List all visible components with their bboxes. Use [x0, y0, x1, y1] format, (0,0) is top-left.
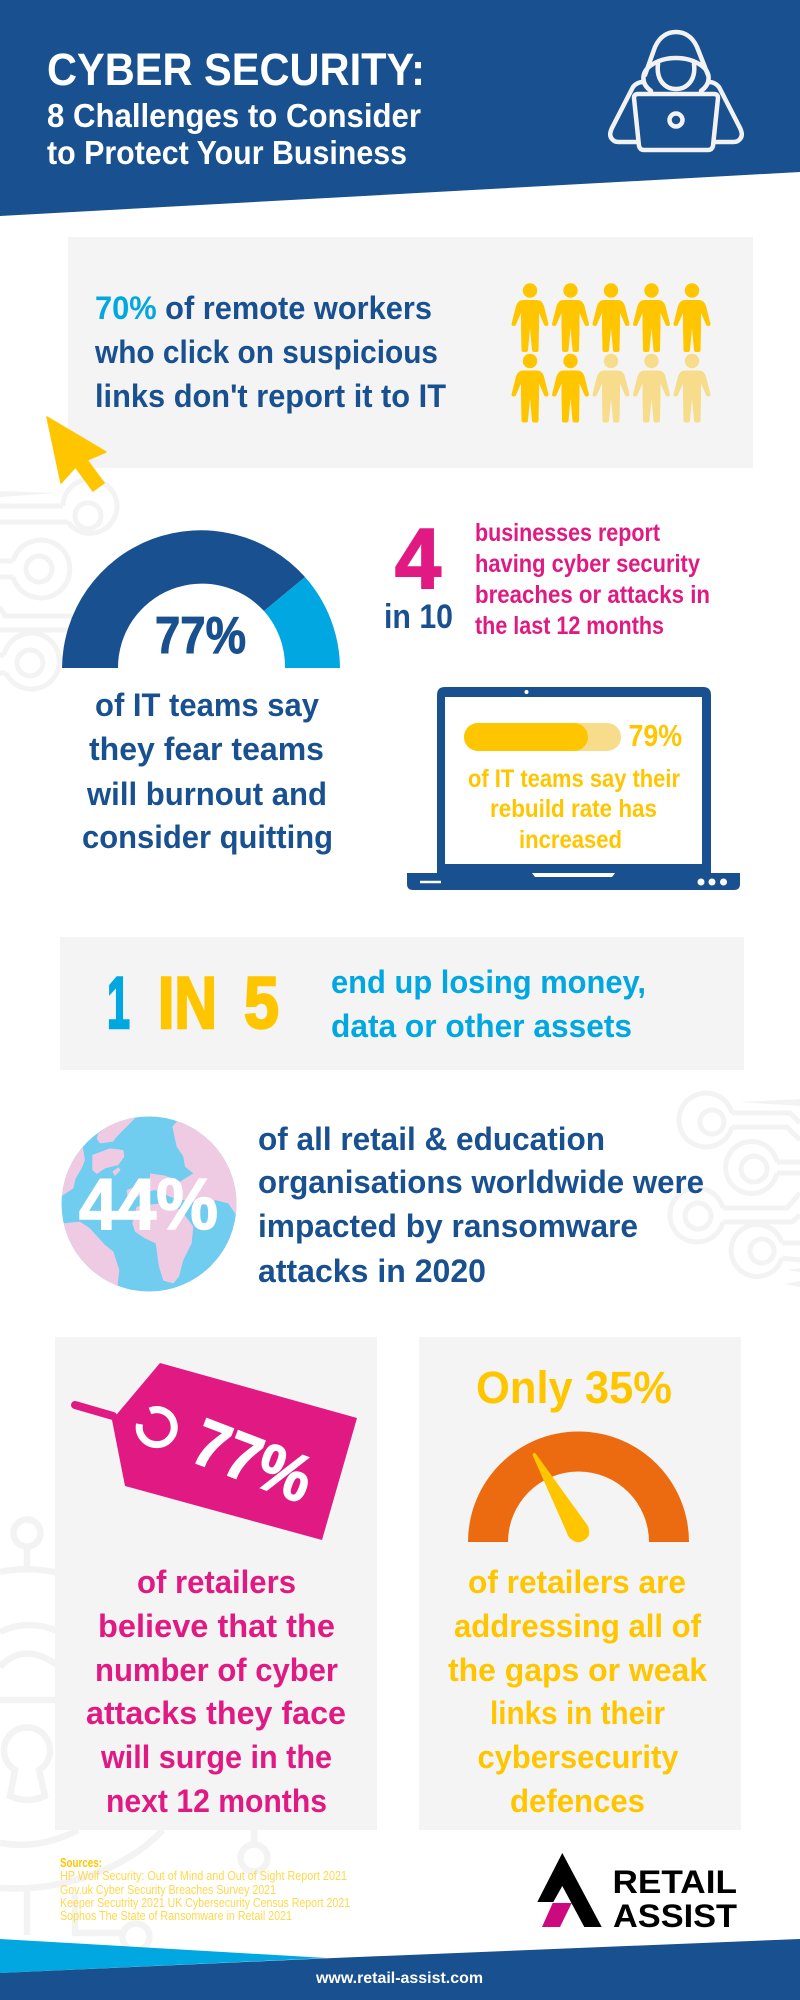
globe: 44%: [60, 1115, 238, 1292]
text: businesses report breaches: [475, 519, 710, 640]
logo: Retail Assist: ASSIST: [613, 1898, 737, 1934]
sources: Gov.uk Cyber Security Breaches Survey 2021: [60, 1883, 276, 1897]
text: businesses report breaches: having cyber security: [475, 550, 700, 578]
progress bar: [464, 723, 621, 751]
title: [47, 44, 425, 171]
text: IT teams burnout: consider quitting: [82, 819, 333, 855]
panel: only 35%: [419, 1337, 741, 1830]
text: ransomware: [258, 1121, 704, 1289]
heading: Only 35%: Only 35%: [476, 1362, 672, 1413]
background circuit pattern: padlock: [0, 1520, 268, 1950]
header banner: [0, 0, 800, 216]
laptop: 79% rebuild rate: [407, 687, 740, 890]
title: 8 Challenges to Consider: [47, 97, 421, 134]
stat: 1 IN 5: [107, 963, 279, 1044]
text: losing money: [331, 964, 646, 1044]
panel: 1 in 5: [60, 937, 744, 1070]
text: IT teams burnout: will burnout and: [86, 776, 327, 812]
text: 70% of remote workers: 70% of remote workers: [95, 290, 432, 326]
sources: HP Wolf Security: Out of Mind and Out of Sight Report 2021: [60, 1869, 347, 1883]
globe: 44%: 44%: [79, 1165, 218, 1245]
text: 70% of remote workers: [94, 290, 446, 414]
sources: Sophos The State of Ransomware in Retail 2021: [60, 1909, 292, 1923]
text: ransomware: impacted by ransomware: [258, 1208, 638, 1244]
text: retailers addressing gaps: of retailers are: [468, 1564, 686, 1600]
footer band: [0, 1939, 800, 2000]
text: retailers addressing gaps: cybersecurity: [478, 1739, 679, 1775]
text: retailers addressing gaps: defences: [510, 1783, 645, 1819]
title: to Protect Your Business: [47, 134, 407, 171]
text: ransomware: attacks in 2020: [258, 1253, 486, 1289]
icon: price tag 77%: 77%: [183, 1404, 323, 1517]
sources: [60, 1856, 350, 1923]
text: 79% rebuild rate: [468, 718, 682, 854]
text: retailers addressing gaps: the gaps or weak: [448, 1652, 707, 1688]
text: retailers surge: next 12 months: [106, 1783, 327, 1819]
sources: Keeper Secutrity 2021 UK Cybersecurity Census Report 2021: [60, 1896, 350, 1910]
gauge: 77% of IT teams: 77%: [155, 607, 246, 665]
text: losing money: data or other assets: [331, 1008, 632, 1044]
text: losing money: end up losing money,: [331, 964, 646, 1000]
gauge: 77% of IT teams: [62, 530, 340, 668]
icon: ten people, seven highlighted: [512, 283, 710, 422]
sources: Sources:: [60, 1856, 102, 1870]
text: businesses report breaches: the last 12 months: [475, 612, 664, 640]
text: retailers surge: of retailers: [137, 1564, 296, 1600]
text: retailers addressing gaps: [448, 1564, 707, 1819]
text: retailers addressing gaps: addressing all of: [454, 1608, 701, 1644]
text: businesses report breaches: breaches or attacks in: [475, 581, 710, 609]
text: retailers surge: [86, 1564, 346, 1819]
panel: remote workers: [68, 237, 753, 468]
text: 79% rebuild rate: increased: [519, 826, 622, 854]
stat: 4 in 10: in 10: [384, 598, 453, 636]
title: CYBER SECURITY:: [47, 44, 425, 95]
logo: Retail Assist: [537, 1853, 737, 1934]
text: retailers surge: attacks they face: [86, 1695, 346, 1731]
stat: 4 in 10: [384, 512, 453, 636]
text: 79% rebuild rate: rebuild rate has: [490, 795, 657, 823]
text: IT teams burnout: [82, 687, 333, 855]
stat: 1 IN 5: 1: [107, 963, 130, 1044]
text: IT teams burnout: they fear teams: [89, 731, 324, 767]
icon: price tag 77%: [75, 1363, 357, 1540]
panel: 77% of retailers: [55, 1337, 377, 1830]
icon: hooded hacker with laptop: [610, 32, 742, 150]
stat: 4 in 10: 4: [395, 512, 441, 607]
laptop body: [407, 687, 740, 890]
text: ransomware: organisations worldwide were: [258, 1164, 704, 1200]
text: retailers surge: will surge in the: [100, 1739, 332, 1775]
background circuit pattern: right: [670, 1093, 800, 1287]
icon: cursor arrow: [47, 417, 106, 491]
logo: Retail Assist: RETAIL: [612, 1864, 737, 1900]
text: 79% rebuild rate: of IT teams say their: [468, 765, 680, 793]
text: ransomware: of all retail & education: [258, 1121, 605, 1157]
text: 79% rebuild rate: 79%: [628, 718, 682, 753]
text: businesses report breaches: businesses report: [475, 519, 661, 547]
text: retailers surge: believe that the: [98, 1608, 335, 1644]
text: IT teams burnout: of IT teams say: [95, 687, 319, 723]
gauge: orange dial: [468, 1432, 689, 1542]
footer url: www.retail-assist.com: [315, 1970, 483, 1987]
text: 70% of remote workers: who click on suspicious: [94, 334, 438, 370]
text: retailers surge: number of cyber: [95, 1652, 338, 1688]
background circuit pattern: left: [0, 479, 117, 689]
stat: 1 IN 5: 5: [244, 963, 279, 1044]
text: 70% of remote workers: links don't report it to IT: [95, 378, 446, 414]
stat: 1 IN 5: IN: [158, 963, 217, 1044]
text: retailers addressing gaps: links in their: [490, 1695, 665, 1731]
